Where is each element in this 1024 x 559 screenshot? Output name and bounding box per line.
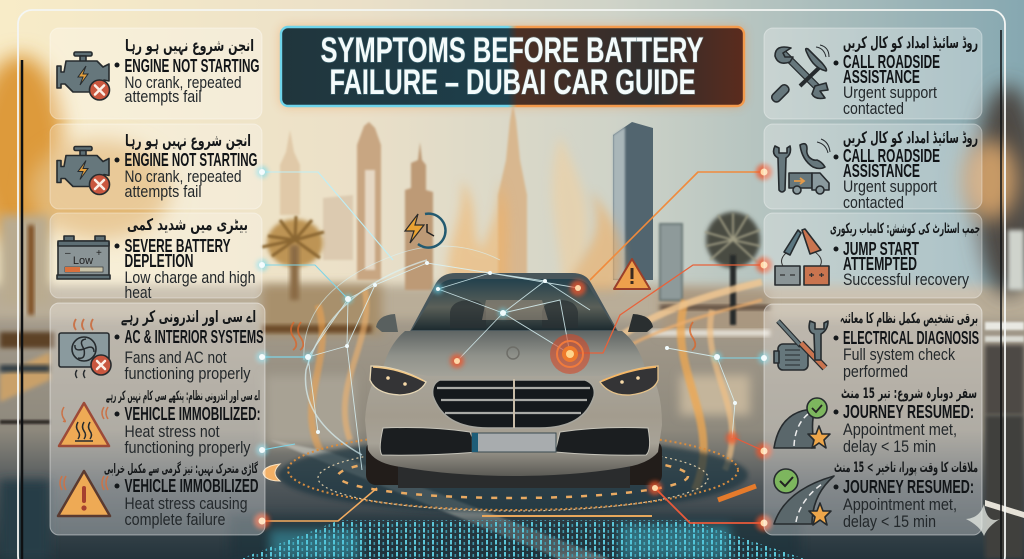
icon: AC unit fault [59,319,111,378]
text: journey resumed 2 [834,460,978,531]
icon: wrench phone van [774,139,830,194]
text: engine not starting: No crank, repeated [124,74,242,92]
glowing nodes [254,164,772,531]
panel: engine not starting 2 [50,124,262,209]
text: vehicle immobilized heat stress: functioning properly [124,439,251,457]
text: electrical diagnosis: performed [843,363,908,381]
icon: low battery: + [96,248,102,259]
text: call roadside assistance: Urgent support [843,84,937,102]
icon: crossed tools [770,45,829,104]
panel: diagnosis and journey [764,304,982,535]
text: call roadside assistance: contacted [843,194,904,212]
text: vehicle immobilized heat stress [106,389,260,457]
heat flames [448,135,623,290]
title text [320,31,704,102]
text: call roadside assistance [834,128,978,212]
car: right headlight [600,366,658,395]
car: underbody [398,465,630,488]
text: vehicle immobilized failure: گاڑی متحرک نہیں: تیز گرمی سے مکمل خرابی [104,461,258,477]
icon: low battery [57,236,110,279]
text: AC and interior systems: AC & INTERIOR SYSTEMS [124,327,264,347]
icon: low battery: – [65,248,71,259]
car: left headlight [370,366,426,395]
skyline [262,105,760,325]
heat flames around car [312,282,762,490]
text: engine not starting: انجن شروع نہیں ہو رہا [125,131,251,151]
text: AC and interior systems: Fans and AC not [124,349,227,367]
text: call roadside assistance: contacted [843,100,904,118]
text: engine not starting [114,131,258,201]
text: call roadside assistance [834,33,978,118]
text: vehicle immobilized failure: VEHICLE IMMOBILIZED [124,476,258,496]
text: AC and interior systems [114,307,264,383]
text: severe battery depletion: SEVERE BATTERY [124,236,230,256]
panel: severe battery depletion [50,213,262,302]
panel: AC and immobilized [50,303,265,535]
text: vehicle immobilized failure [104,461,258,529]
car: number plate [472,433,556,452]
heat waves beside car [291,322,695,350]
text: call roadside assistance: ASSISTANCE [843,67,920,87]
text: call roadside assistance: Urgent support [843,178,937,196]
icon: jumper cables and batteries [775,229,829,285]
text: severe battery depletion [114,215,256,302]
text: vehicle immobilized failure: complete failure [124,511,226,529]
icon: road with check and star [774,398,830,448]
car: windshield glass [412,279,616,330]
text: vehicle immobilized heat stress: VEHICLE IMMOBILIZED: [124,404,260,424]
text: electrical diagnosis [834,311,979,381]
title text: FAILURE – DUBAI CAR GUIDE [330,63,696,102]
text: journey resumed 2: delay < 15 min [843,513,936,531]
text: AC and interior systems: اے سی اور اندرونی کر رہے [121,307,256,326]
text: vehicle immobilized heat stress: Heat stress not [124,423,220,441]
target hotspot on hood [550,334,590,374]
text: vehicle immobilized failure: Heat stress causing [124,495,248,513]
icon: low battery: Low [73,255,93,267]
text: اے سی اور اندرونی نظام: پنکھے سی کام نہیں کر رہے [106,389,260,404]
text: severe battery depletion: Low charge and high [124,269,256,287]
title banner [280,26,745,107]
text: journey resumed 1: delay < 15 min [843,438,936,456]
text: jump start attempted: Successful recovery [843,271,970,289]
icon: general warning [58,471,110,516]
diagnostic network lines [262,172,764,523]
text: call roadside assistance: CALL ROADSIDE [843,52,940,72]
car [365,273,662,488]
text: engine not starting: No crank, repeated [124,168,242,186]
icon: motor and tools [774,321,828,370]
text: severe battery depletion: DEPLETION [124,251,194,271]
text: engine not starting: ENGINE NOT STARTING [124,56,260,76]
text: AC and interior systems: functioning properly [124,365,251,383]
title text: SYMPTOMS BEFORE BATTERY [320,31,704,70]
icon: engine fault [57,52,110,100]
text: call roadside assistance: ASSISTANCE [843,161,920,181]
car: hood [382,331,646,380]
text: engine not starting: attempts fail [124,183,202,201]
text: engine not starting: انجن شروع نہیں ہو رہا [125,36,254,56]
text: journey resumed 2: Appointment met, [843,496,957,514]
text: severe battery depletion: heat [124,284,152,302]
road radar ring [230,430,805,559]
crescent node [263,464,280,481]
car: grille [433,379,594,428]
text: jump start attempted: JUMP START [843,239,919,259]
panel: call roadside assistance 2 [764,124,982,212]
car: body [365,367,662,476]
text: severe battery depletion: بیٹری میں شدید کمی [127,215,248,234]
car: wheels [366,440,662,485]
panel: engine not starting 1 [50,28,262,119]
car: roof and windshield [408,273,620,335]
text: jump start attempted: ATTEMPTED [843,254,917,274]
icon: heat warning [59,403,109,446]
car: mirrors [376,314,653,332]
text: journey resumed 1: Appointment met, [843,421,957,439]
text: engine not starting: ENGINE NOT STARTING [124,150,258,170]
text: engine not starting: attempts fail [124,88,202,106]
icon: warning triangle on street [614,259,650,289]
icon: engine fault [57,146,110,194]
text: engine not starting [114,36,260,106]
panel: call roadside assistance 1 [764,28,982,119]
icon: lightning clock [405,214,446,248]
text: journey resumed 1 [834,386,977,456]
text: jump start attempted [830,221,980,289]
text: call roadside assistance: CALL ROADSIDE [843,146,940,166]
text: electrical diagnosis: Full system check [843,346,956,364]
sparkle mark [966,504,1000,536]
panel: jump start [764,213,982,298]
car: badge [507,347,519,359]
car: bumper intakes [380,428,650,455]
icon: curved road with check and star [774,469,834,525]
